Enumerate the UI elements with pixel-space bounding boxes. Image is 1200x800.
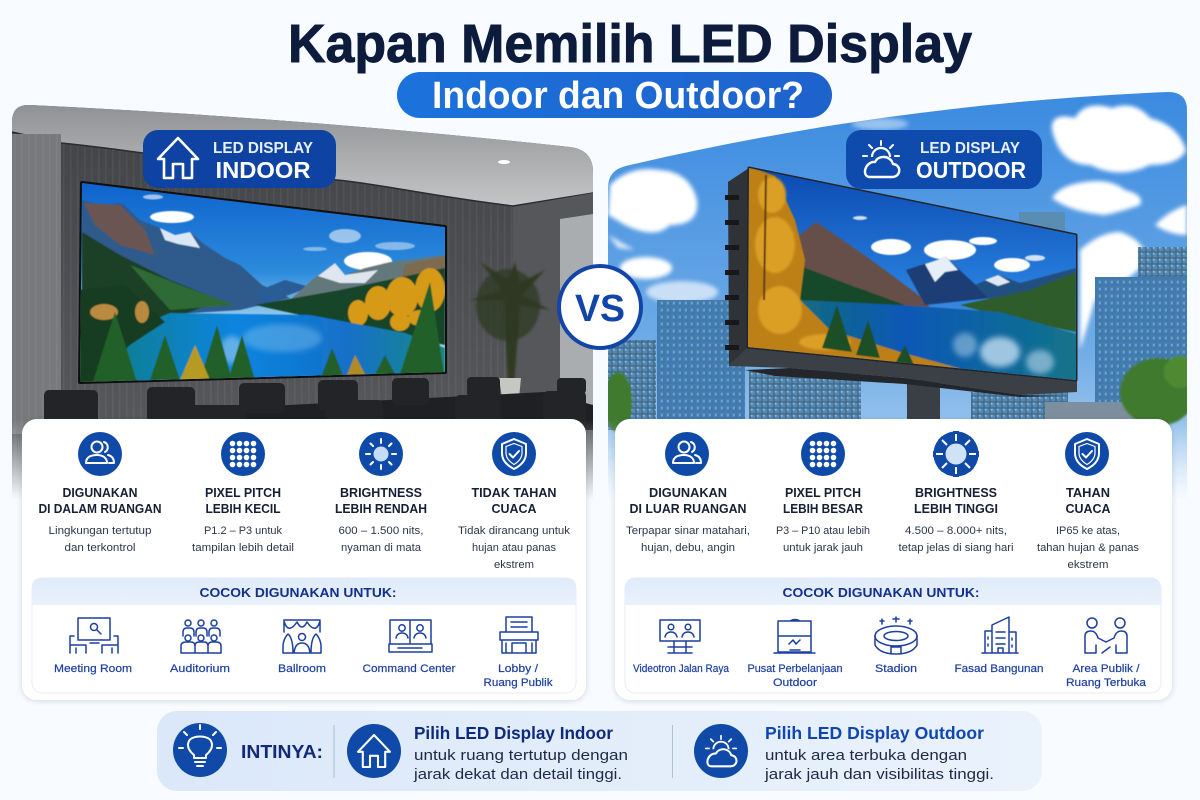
VS badge: VS [575, 288, 625, 330]
feature: pixel pitch lebih besar: LEBIH BESAR [783, 502, 863, 516]
label: intinya: INTINYA: [241, 742, 323, 762]
feature: tidak tahan cuaca: CUACA [492, 502, 536, 516]
icon: cloud circle [694, 724, 748, 778]
badge: LED Display Outdoor: LED DISPLAY [920, 140, 1020, 157]
feature: brightness lebih tinggi: BRIGHTNESS [915, 486, 997, 500]
feature: brightness lebih tinggi: tetap jelas di siang hari [898, 542, 1014, 554]
feature: pixel pitch lebih besar: P3 – P10 atau lebih [776, 525, 870, 537]
use: public area: Ruang Terbuka [1066, 677, 1147, 689]
feature: brightness lebih rendah [335, 432, 427, 554]
feature: brightness lebih rendah: nyaman di mata [341, 542, 422, 554]
suitable uses panel [32, 578, 576, 693]
summary: outdoor [764, 723, 994, 783]
feature: pixel pitch lebih besar: untuk jarak jauh [783, 542, 863, 554]
summary: outdoor: untuk area terbuka dengan [765, 747, 967, 764]
feature: pixel pitch lebih kecil: LEBIH KECIL [206, 502, 281, 516]
suitable uses panel [625, 578, 1161, 693]
feature: digunakan di luar ruangan [626, 432, 750, 554]
use: meeting room: Meeting Room [54, 663, 132, 675]
badge: LED Display Indoor: INDOOR [216, 157, 311, 183]
use: stadium [875, 617, 917, 675]
summary band [157, 711, 1042, 791]
summary: indoor: Pilih LED Display Indoor [414, 723, 613, 743]
indoor screen landscape [78, 180, 448, 385]
use: meeting room [54, 618, 132, 675]
feature: pixel pitch lebih kecil: tampilan lebih detail [192, 542, 294, 554]
VS badge [559, 266, 641, 348]
feature: digunakan di luar ruangan: DI LUAR RUANGAN [630, 502, 746, 516]
indoor screen bezel [80, 183, 445, 382]
feature: digunakan di dalam ruangan: dan terkontrol [64, 542, 136, 554]
room wall [12, 100, 594, 530]
icon: house [158, 138, 198, 178]
subtitle pill: Indoor dan Outdoor? [432, 75, 804, 117]
plant [470, 262, 550, 385]
feature: brightness lebih tinggi: LEBIH TINGGI [914, 502, 998, 516]
feature: digunakan di luar ruangan: DIGUNAKAN [649, 486, 727, 500]
feature: digunakan di dalam ruangan: Lingkungan tertutup [48, 525, 152, 537]
feature: tahan cuaca: ekstrem [1068, 559, 1108, 571]
right wall panel [513, 193, 593, 290]
outdoor screen landscape [745, 165, 1080, 385]
feature: pixel pitch lebih besar [776, 432, 870, 554]
summary: indoor [413, 723, 628, 783]
use: auditorium [170, 620, 230, 675]
feature: digunakan di luar ruangan: hujan, debu, angin [641, 542, 735, 554]
feature: brightness lebih tinggi [898, 431, 1014, 554]
use: public area: Area Publik / [1072, 663, 1141, 675]
use: ballroom [278, 620, 326, 675]
suitable uses panel: COCOK DIGUNAKAN UNTUK: [200, 585, 396, 600]
use: command center [362, 620, 456, 675]
feature: pixel pitch lebih kecil: PIXEL PITCH [205, 486, 281, 500]
feature: tidak tahan cuaca [458, 432, 571, 571]
photo bottom fade [0, 420, 1200, 539]
use: ballroom: Ballroom [278, 663, 326, 675]
use: auditorium: Auditorium [170, 663, 230, 675]
feature: pixel pitch lebih besar: PIXEL PITCH [785, 486, 861, 500]
badge: LED Display Outdoor: OUTDOOR [916, 157, 1026, 183]
use: command center: Command Center [362, 663, 456, 675]
title: Kapan Memilih LED Display [288, 14, 972, 74]
use: building facade: Fasad Bangunan [954, 663, 1044, 675]
feature: tahan cuaca: CUACA [1066, 502, 1110, 516]
summary: indoor: jarak dekat dan detail tinggi. [413, 766, 622, 783]
use: shopping center: Outdoor [773, 677, 817, 689]
summary: outdoor: jarak jauh dan visibilitas tinggi. [764, 766, 994, 783]
use: building facade [954, 617, 1044, 675]
suitable uses panel: COCOK DIGUNAKAN UNTUK: [782, 585, 980, 600]
summary: indoor: untuk ruang tertutup dengan [414, 747, 628, 764]
feature: tahan cuaca: tahan hujan & panas [1037, 542, 1140, 554]
trees [604, 356, 1196, 432]
ceiling [12, 100, 593, 206]
clouds [608, 106, 1187, 350]
window [560, 214, 593, 405]
summary: outdoor: Pilih LED Display Outdoor [765, 723, 984, 743]
use: shopping center: Pusat Perbelanjaan [748, 663, 842, 675]
panel: indoor photo [12, 100, 594, 530]
feature: brightness lebih rendah: 600 – 1.500 nits, [338, 525, 424, 537]
billboard frame [725, 168, 1077, 397]
use: lobby: Ruang Publik [484, 677, 553, 689]
panel: outdoor photo [608, 92, 1187, 490]
ceiling spotlight [498, 160, 510, 164]
feature: tidak tahan cuaca: Tidak dirancang untuk [458, 525, 571, 537]
feature: pixel pitch lebih kecil [192, 432, 294, 554]
panel: outdoor card [615, 419, 1172, 700]
feature: tahan cuaca: TAHAN [1066, 486, 1110, 500]
billboard pole [907, 380, 940, 419]
feature: digunakan di luar ruangan: Terpapar sinar matahari, [626, 525, 750, 537]
icon: light bulb [173, 723, 227, 777]
use: stadium: Stadion [875, 663, 917, 675]
icon: house circle [347, 724, 401, 778]
sky [608, 92, 1187, 490]
feature: pixel pitch lebih kecil: P1.2 – P3 untuk [204, 525, 282, 537]
feature: digunakan di dalam ruangan: DI DALAM RUANGAN [38, 502, 162, 516]
use: public area [1066, 618, 1147, 689]
use: lobby: Lobby / [498, 663, 539, 675]
feature: brightness lebih rendah: BRIGHTNESS [340, 486, 422, 500]
feature: tidak tahan cuaca: ekstrem [494, 559, 534, 571]
badge: LED Display Outdoor [846, 130, 1042, 189]
feature: tahan cuaca: IP65 ke atas, [1056, 525, 1120, 537]
left wall panel [12, 134, 61, 434]
badge: LED Display Indoor [143, 130, 336, 188]
table [245, 392, 593, 430]
feature: tidak tahan cuaca: hujan atau panas [472, 542, 556, 554]
use: videotron [633, 620, 730, 675]
feature: brightness lebih tinggi: 4.500 – 8.000+ nits, [905, 525, 1007, 537]
use: videotron: Videotron Jalan Raya [633, 663, 730, 675]
icon: cloud and sun [863, 141, 899, 177]
feature: digunakan di dalam ruangan: DIGUNAKAN [62, 486, 138, 500]
feature: tidak tahan cuaca: TIDAK TAHAN [472, 486, 556, 500]
panel: indoor card [22, 419, 586, 700]
plant pot [499, 378, 521, 394]
chairs [44, 377, 586, 419]
badge: LED Display Indoor: LED DISPLAY [213, 140, 313, 157]
feature: brightness lebih rendah: LEBIH RENDAH [335, 502, 427, 516]
use: lobby [484, 617, 553, 689]
feature: tahan cuaca [1037, 432, 1140, 571]
use: shopping center [748, 620, 842, 689]
feature: digunakan di dalam ruangan [38, 432, 162, 554]
buildings [608, 212, 1187, 430]
